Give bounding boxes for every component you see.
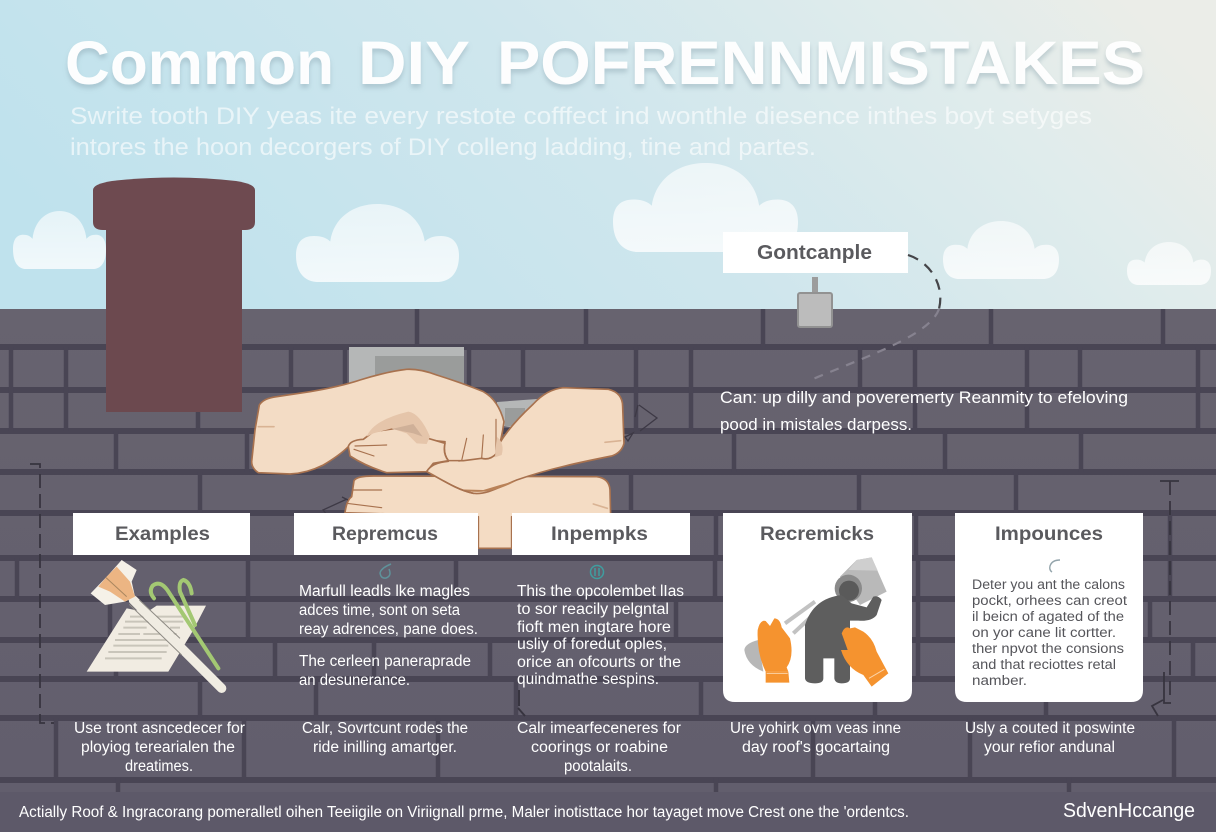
body text <box>517 583 684 688</box>
footer bar: SdvenHccange <box>1063 800 1195 822</box>
subtitle: Swrite tooth DIY yeas ite every restote cofffect ind wonthle diesence inthes boyt setyges <box>70 103 1092 130</box>
icon: small arc <box>1050 560 1060 572</box>
caption: Usly a couted it poswinte <box>965 720 1135 737</box>
panel: impounces: Impounces <box>995 524 1103 545</box>
caption: Ure yohirk ovm veas inne <box>730 720 901 737</box>
caption <box>517 720 681 775</box>
caption: your refior andunal <box>984 739 1115 756</box>
roof vents behind hands <box>349 347 537 430</box>
panel: repremcus <box>294 513 478 756</box>
dashed curved arrow <box>813 255 940 379</box>
caption <box>302 720 468 756</box>
lower arm <box>345 476 611 548</box>
body text: an desunerance. <box>299 672 410 689</box>
dashed connector: right <box>1152 481 1179 716</box>
body text: orice an ofcourts or the <box>517 654 681 671</box>
body text: fioft men ingtare hore <box>517 619 671 636</box>
body text: to sor reacily pelgntal <box>517 601 669 618</box>
body text: on yor cane lit cortter. <box>972 625 1116 640</box>
caption <box>730 720 901 756</box>
title: DIY <box>358 29 470 97</box>
caption: ride inilling amartger. <box>313 739 457 756</box>
caption: dreatimes. <box>125 758 193 775</box>
icon: paper and brush <box>87 560 222 688</box>
right arm <box>427 388 624 494</box>
body text: usliy of foredut oples, <box>517 636 667 653</box>
small hand fingers <box>348 428 448 473</box>
body text: reay adrences, pane does. <box>299 621 478 638</box>
panel: impounces <box>955 513 1143 756</box>
body text: The cerleen paneraprade <box>299 653 471 670</box>
caption <box>965 720 1135 756</box>
callout box <box>723 232 908 273</box>
body text: This the opcolembet lIas <box>517 583 684 600</box>
body text: il beicn of agated of the <box>972 609 1124 624</box>
caption <box>74 720 245 775</box>
sky background <box>0 0 1216 310</box>
panel: inpempks: Inpempks <box>551 524 648 545</box>
upper left hand <box>252 369 504 474</box>
wrist overlap <box>427 461 467 483</box>
chimney <box>93 178 255 412</box>
title: POFRENNMISTAKES <box>497 29 1145 97</box>
caption: day roof's gocartaing <box>742 739 890 756</box>
body text: ther npvot the consions <box>972 641 1124 656</box>
caption: coorings or roabine <box>531 739 668 756</box>
small arrow marks by hands <box>323 405 657 516</box>
title: Common <box>65 29 334 97</box>
body text: Deter you ant the calons <box>972 577 1125 592</box>
icon: teal ring <box>590 566 604 578</box>
subtitle: intores the hoon decorgers of DIY colleng ladding, tine and partes. <box>70 134 816 161</box>
panel: repremcus: Repremcus <box>332 524 438 545</box>
panel: examples <box>73 513 250 775</box>
title <box>65 29 1145 97</box>
caption: Use tront asncedecer for <box>74 720 245 737</box>
subtitle <box>70 103 1092 161</box>
caption: Calr, Sovrtcunt rodes the <box>302 720 468 737</box>
caption: Calr imearfeceneres for <box>517 720 681 737</box>
footer bar <box>0 792 1216 832</box>
description text: Can: up dilly and poveremerty Reanmity to efeloving <box>720 389 1128 407</box>
description text <box>720 389 1128 434</box>
icon: small vent device <box>798 277 832 327</box>
body text: adces time, sont on seta <box>299 602 460 619</box>
clouds <box>13 163 1211 286</box>
body text: namber. <box>972 673 1027 688</box>
dashed connector: left <box>30 464 54 723</box>
icon: teal swirl <box>380 564 391 578</box>
panel: examples: Examples <box>115 524 210 545</box>
body text: pockt, orhees can creot <box>972 593 1127 608</box>
body text: quindmathe sespins. <box>517 671 659 688</box>
panel: inpempks <box>512 513 690 775</box>
body text <box>972 577 1127 688</box>
panel: recremicks <box>723 513 912 756</box>
caption: pootalaits. <box>564 758 632 775</box>
body text: Marfull leadls lke magles <box>299 583 470 600</box>
icon: roofer with orange gloves <box>744 557 888 687</box>
footer bar: Actially Roof & Ingracorang pomeralletl oihen Teeiigile on Viriignall prme, Maler inotisttace hor tayaget move Crest one the 'ordentcs. <box>19 804 909 821</box>
panel: recremicks: Recremicks <box>760 524 874 545</box>
small dark mark <box>518 690 525 716</box>
description text: pood in mistales darpess. <box>720 416 912 434</box>
illustration: clasped hands <box>252 369 624 548</box>
brick roof wall <box>0 309 1216 792</box>
thumb shading <box>367 412 430 444</box>
body text <box>299 583 478 689</box>
body text: and that reciottes retal <box>972 657 1116 672</box>
caption: ployiog terearialen the <box>81 739 235 756</box>
callout box: Gontcanple <box>757 242 872 264</box>
